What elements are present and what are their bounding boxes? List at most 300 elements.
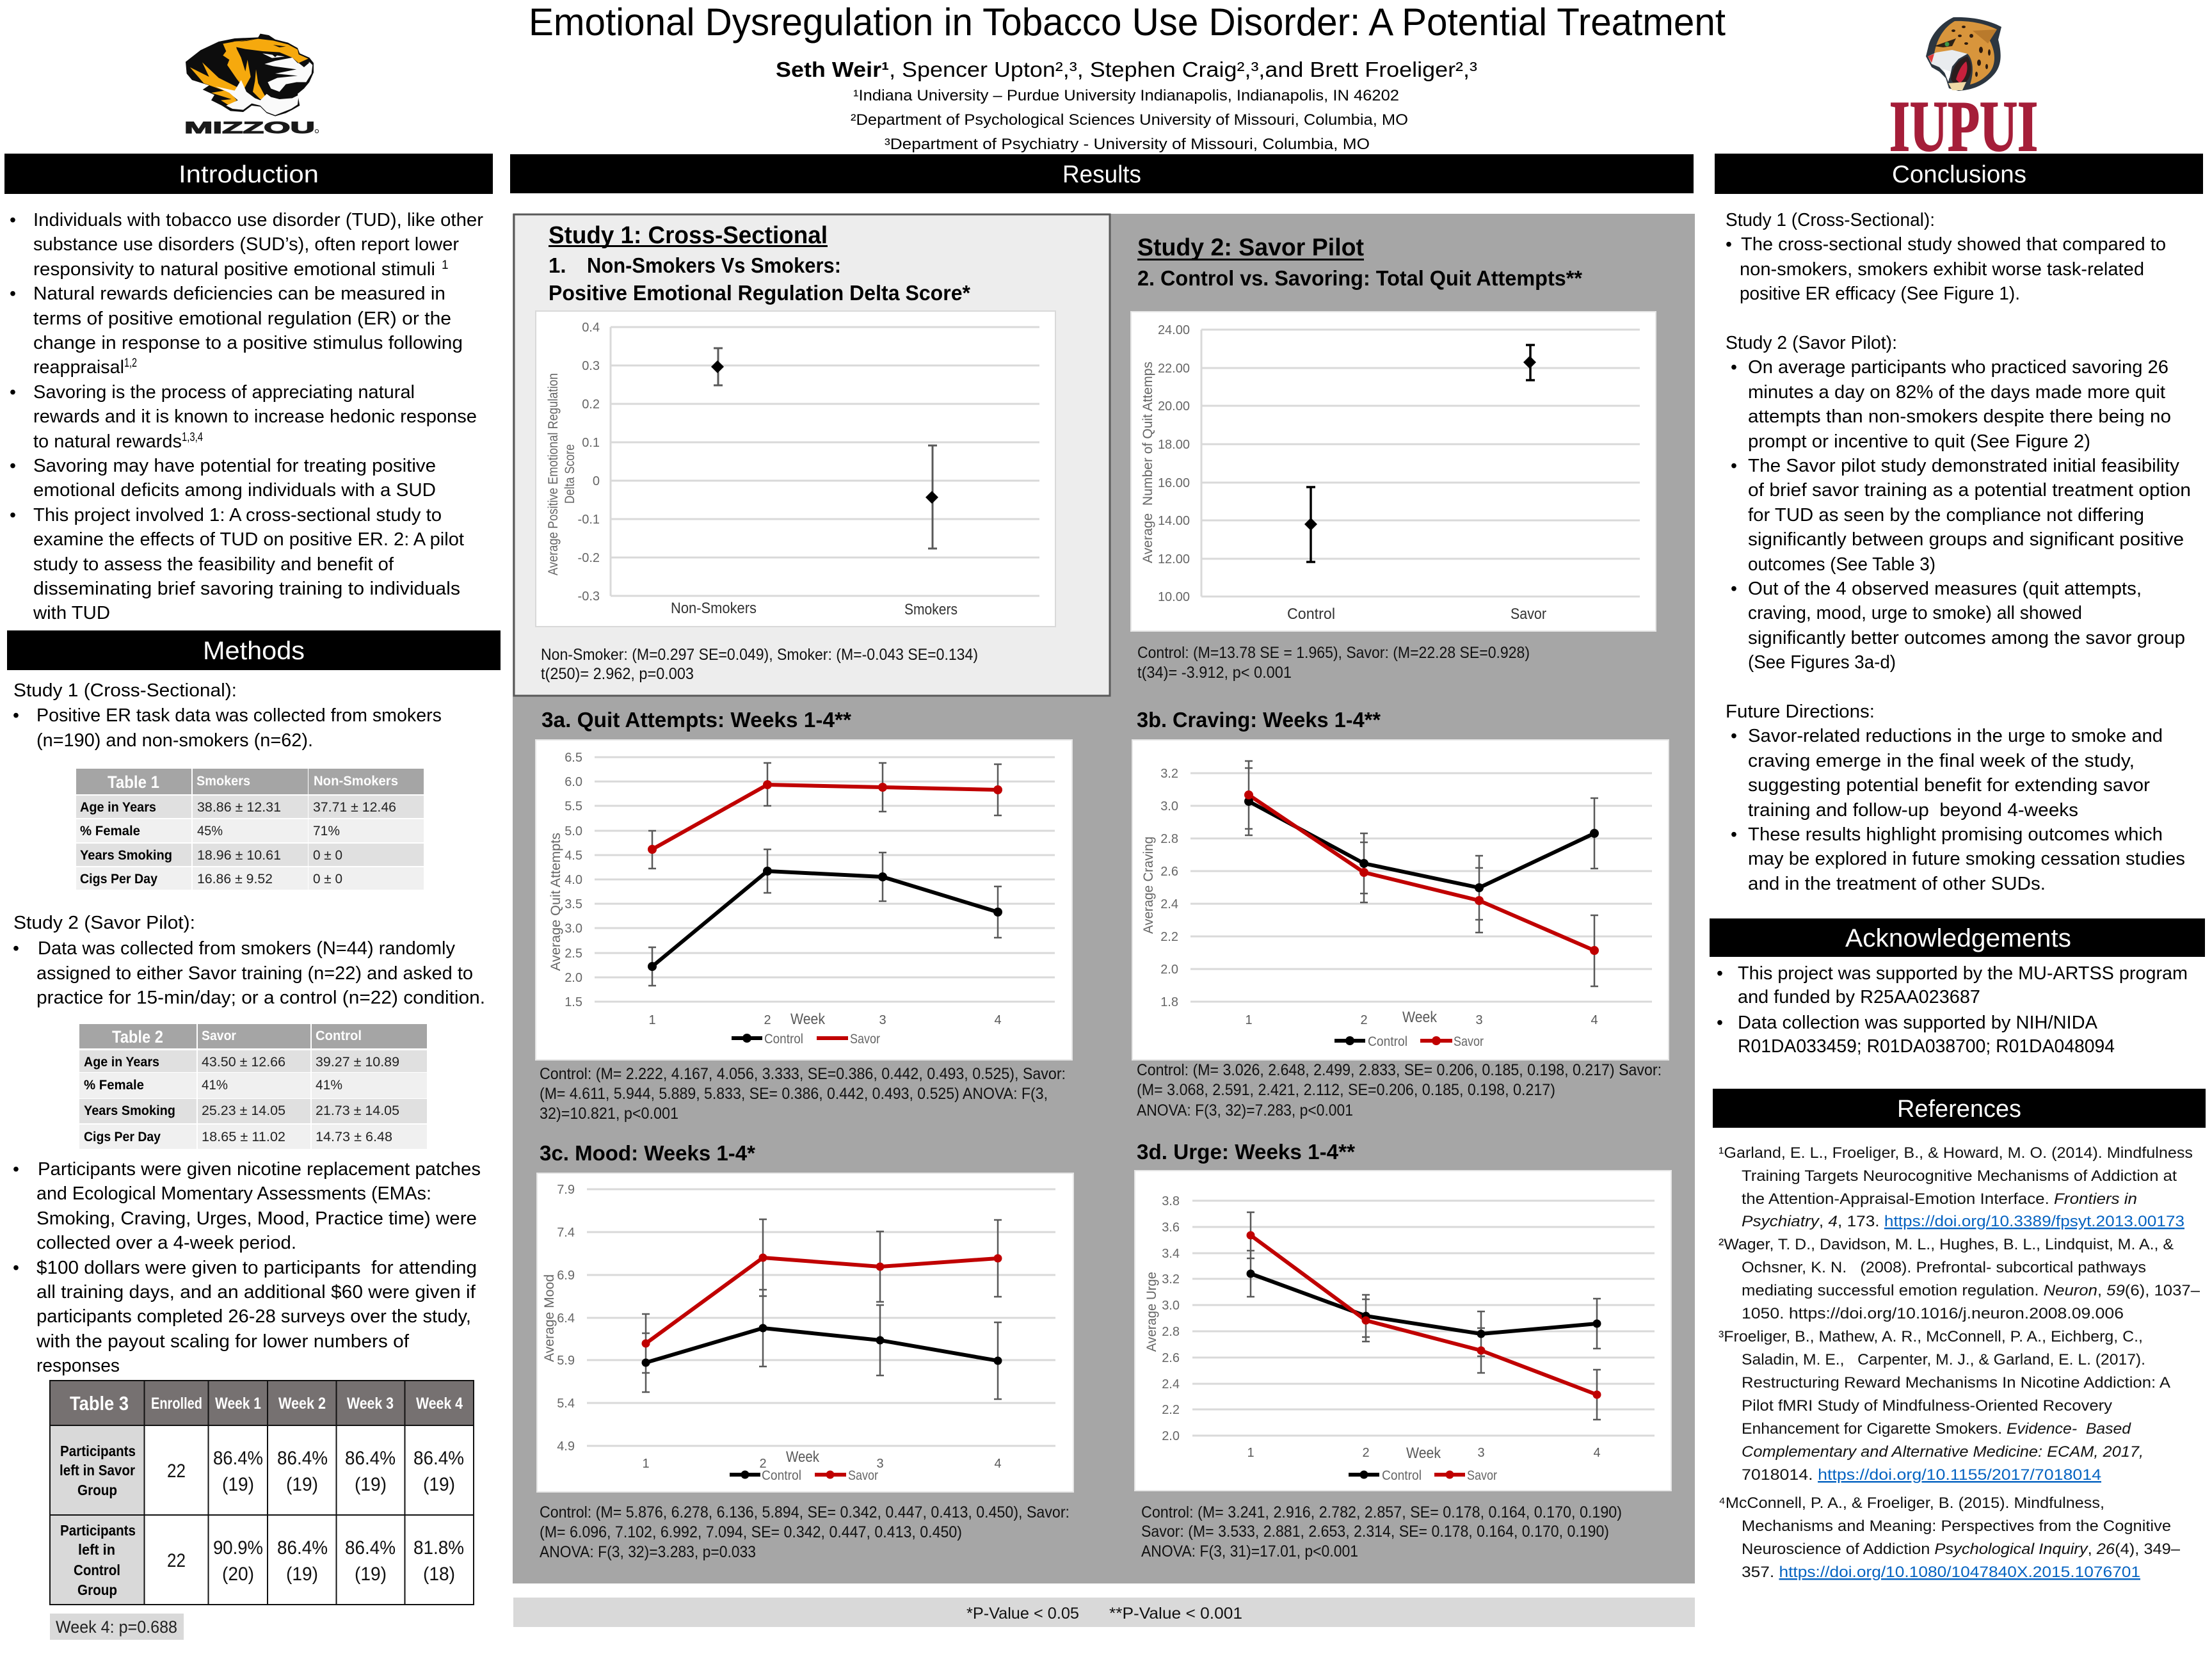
text block: study 2 conclusions: of brief savor training as a potential treatment option bbox=[1748, 480, 2191, 501]
table 2: 43.50 ± 12.66 bbox=[202, 1055, 285, 1070]
table 3: Participants bbox=[60, 1443, 136, 1459]
chart: 3b craving line chart: 3.0 bbox=[1160, 799, 1178, 813]
chart: figure 2 total quit attempts: 22.00 bbox=[1158, 362, 1190, 376]
text block: reference 3: ³Froeliger, B., Mathew, A. R., McConnell, P. A., Eichberg, C., bbox=[1719, 1328, 2143, 1345]
chart: figure 2 total quit attempts: 18.00 bbox=[1158, 438, 1190, 452]
text block: study 2 conclusions: craving, mood, urge to smoke) all showed bbox=[1748, 603, 2082, 623]
text block: study 2 conclusions: significantly better outcomes among the savor group bbox=[1748, 628, 2185, 648]
text block: 3a statistics: 32)=10.821, p<0.001 bbox=[540, 1105, 678, 1123]
heading: 3d: 3d. Urge: Weeks 1-4** bbox=[1137, 1140, 1355, 1164]
text block: introduction bullets: rewards and it is known to increase hedonic response bbox=[33, 406, 477, 427]
table 3: (18) bbox=[423, 1564, 455, 1585]
text block: figure 2 statistics bbox=[1137, 644, 1530, 682]
text block: future directions: training and follow-up beyond 4-weeks bbox=[1748, 800, 2078, 821]
chart: 3d urge line chart: Week bbox=[1406, 1445, 1441, 1462]
chart: 3d urge line chart: 3.8 bbox=[1162, 1194, 1180, 1208]
table 3: Week 2 bbox=[278, 1395, 326, 1413]
text block: introduction bullets: Savoring may have potential for treating positive bbox=[33, 456, 436, 476]
text block: future directions: may be explored in future smoking cessation studies bbox=[1748, 849, 2185, 869]
table 1: 45% bbox=[197, 824, 223, 838]
chart: 3d urge line chart: 2.0 bbox=[1162, 1429, 1180, 1443]
text block: future directions: craving emerge in the final week of the study, bbox=[1748, 751, 2135, 771]
chart: 3b craving line chart: 1 bbox=[1245, 1013, 1253, 1027]
chart: figure 1 positive ER delta score: -0.3 bbox=[578, 589, 600, 604]
text block: study 2 methods: assigned to either Savor training (n=22) and asked to bbox=[36, 963, 473, 984]
table 3: Enrolled bbox=[151, 1395, 202, 1413]
panel: 3a quit attempts bbox=[536, 708, 1072, 1123]
chart: 3c mood line chart: 1 bbox=[642, 1457, 650, 1471]
text block: procedures bullets: and Ecological Momentary Assessments (EMAs: bbox=[36, 1183, 431, 1204]
table 2: Control bbox=[316, 1029, 362, 1043]
text block: study 2 conclusions: • bbox=[1731, 357, 1737, 378]
chart: 3a quit attempts line chart: 4 bbox=[994, 1013, 1002, 1027]
subheading: figure 2 title: 2. Control vs. Savoring: Total Quit Attempts** bbox=[1137, 266, 1582, 290]
text block: reference 3: Saladin, M. E., Carpenter, M. J., & Garland, E. L. (2017). bbox=[1742, 1351, 2145, 1368]
text block: study 2 methods bbox=[13, 913, 485, 1008]
text block: reference 1: Psychiatry , 4, 173. https://doi.org/10.3389/fpsyt.2013.00173 bbox=[1742, 1213, 2184, 1230]
table 2: % Female bbox=[84, 1078, 144, 1093]
chart: 3a quit attempts line chart: 3.5 bbox=[565, 897, 582, 911]
text block: introduction bullets: substance use disorders (SUD’s), often report lower bbox=[33, 234, 460, 255]
logo wordmark: MIZZOU: MIZZOU bbox=[184, 119, 315, 137]
chart: figure 1 positive ER delta score: Non-Smokers bbox=[671, 600, 757, 617]
text block: reference 3: Restructuring Reward Mechanisms In Nicotine Addiction: A bbox=[1742, 1374, 2171, 1391]
text block: 3a statistics: (M= 4.611, 5.944, 5.889, 5.833, SE= 0.386, 0.442, 0.493, 0.525) ANOVA: F(3, bbox=[540, 1085, 1048, 1103]
text block: introduction bullets: change in response to a positive stimulus following bbox=[33, 333, 463, 353]
text block: reference 4: ⁴McConnell, P. A., & Froeliger, B. (2015). Mindfulness, bbox=[1719, 1495, 2104, 1512]
text block: introduction bullets: • bbox=[10, 210, 16, 230]
text block: introduction bullets: Individuals with tobacco use disorder (TUD), like other bbox=[33, 210, 484, 230]
text block: study 2 conclusions: outcomes (See Table 3) bbox=[1748, 554, 1936, 575]
table 2: 25.23 ± 14.05 bbox=[202, 1103, 285, 1118]
table 2: Savor bbox=[202, 1029, 236, 1043]
chart: figure 2 total quit attempts: 14.00 bbox=[1158, 514, 1190, 528]
heading: conclusions: Conclusions bbox=[1892, 161, 2026, 188]
table 3: Group bbox=[77, 1582, 117, 1598]
table 2 bbox=[79, 1024, 427, 1149]
chart: 3c mood line chart: 6.9 bbox=[557, 1269, 575, 1283]
chart: figure 1 positive ER delta score: 0 bbox=[593, 474, 600, 488]
chart: 3a quit attempts line chart: 6.0 bbox=[565, 775, 582, 789]
heading: 3c: 3c. Mood: Weeks 1-4* bbox=[540, 1141, 755, 1165]
chart: 3c mood line chart: 3 bbox=[876, 1457, 884, 1471]
table 1: Years Smoking bbox=[80, 848, 172, 863]
text block: reference 4: Mechanisms and Meaning: Perspectives from the Cognitive bbox=[1742, 1518, 2171, 1535]
heading: study 1: Study 1: Cross-Sectional bbox=[549, 222, 828, 249]
text block: procedures bullets: • bbox=[13, 1258, 19, 1278]
table 2: 39.27 ± 10.89 bbox=[316, 1055, 399, 1070]
chart: figure 1 positive ER delta score: -0.2 bbox=[578, 551, 600, 565]
chart: 3c mood line chart: 6.4 bbox=[557, 1311, 575, 1326]
chart: 3a quit attempts line chart: 2 bbox=[764, 1013, 771, 1027]
panel: study 2 savor pilot bbox=[1131, 234, 1656, 682]
table 3: (19) bbox=[286, 1474, 318, 1495]
table 1: 71% bbox=[313, 824, 340, 838]
text block: study 2 conclusions: • bbox=[1731, 579, 1737, 599]
chart: figure 1 positive ER delta score: -0.1 bbox=[578, 513, 600, 527]
chart: 3d urge line chart: Average Urge bbox=[1144, 1272, 1159, 1352]
affiliations: ¹Indiana University – Purdue University Indianapolis, Indianapolis, IN 46202 bbox=[853, 87, 1399, 104]
text block: procedures bullets: all training days, and an additional $60 were given if bbox=[36, 1282, 476, 1302]
table 3: 86.4% bbox=[277, 1448, 328, 1469]
table 1: 16.86 ± 9.52 bbox=[197, 872, 273, 886]
legend: p-value significance bar bbox=[513, 1598, 1695, 1627]
text block: figure 1 statistics: t(250)= 2.962, p=0.003 bbox=[541, 665, 694, 683]
table 2: Years Smoking bbox=[84, 1103, 175, 1118]
chart: 3b craving line chart: 2 bbox=[1360, 1013, 1368, 1027]
text block: study 2 conclusions bbox=[1726, 333, 2191, 673]
text block: reference 3 bbox=[1719, 1328, 2171, 1484]
table 3: 81.8% bbox=[413, 1537, 464, 1559]
chart: 3a quit attempts line chart: 4.0 bbox=[565, 873, 582, 887]
chart: figure 2 total quit attempts: 12.00 bbox=[1158, 552, 1190, 566]
text block: reference 3: 7018014. https://doi.org/10.1155/2017/7018014 bbox=[1742, 1466, 2101, 1484]
table 3: (20) bbox=[222, 1564, 254, 1585]
table 3: 86.4% bbox=[413, 1448, 464, 1469]
chart: 3b craving line chart: 2.6 bbox=[1160, 865, 1178, 879]
table 3: Week 3 bbox=[347, 1395, 394, 1413]
table 3: (19) bbox=[423, 1474, 455, 1495]
text block: study 2 conclusions: The Savor pilot study demonstrated initial feasibility bbox=[1748, 456, 2180, 476]
chart: 3b craving line chart: 1.8 bbox=[1160, 995, 1178, 1009]
text block: acknowledgements: and funded by R25AA023687 bbox=[1738, 987, 1980, 1007]
subheading: figure 1 title: Positive Emotional Regulation Delta Score* bbox=[549, 281, 970, 305]
heading: 3a: 3a. Quit Attempts: Weeks 1-4** bbox=[541, 708, 851, 732]
text block: study 1 conclusions: non-smokers, smokers exhibit worse task-related bbox=[1740, 259, 2144, 280]
text block: study 2 methods: • bbox=[13, 938, 19, 959]
text block: study 1 conclusions: • bbox=[1726, 234, 1732, 255]
panel: acknowledgements bbox=[1710, 918, 2205, 1057]
text block: study 1 conclusions: Study 1 (Cross-Sectional): bbox=[1726, 210, 1935, 230]
callout: week 4 p-value bbox=[50, 1614, 184, 1640]
text block: study 2 methods: practice for 15-min/day; or a control (n=22) condition. bbox=[36, 988, 485, 1008]
table 3 bbox=[50, 1381, 474, 1605]
chart: figure 2 total quit attempts: 16.00 bbox=[1158, 476, 1190, 490]
chart: figure 1 positive ER delta score: 0.4 bbox=[582, 321, 600, 335]
panel: references bbox=[1713, 1089, 2206, 1581]
text block: reference 1 bbox=[1719, 1144, 2193, 1230]
text block: 3c statistics: Control: (M= 5.876, 6.278, 6.136, 5.894, SE= 0.342, 0.447, 0.413, 0.450), Savor: bbox=[540, 1503, 1070, 1521]
chart: 3d urge line chart: Savor bbox=[1467, 1468, 1497, 1483]
panel: results bbox=[510, 154, 1695, 1627]
text block: reference 2: Ochsner, K. N. (2008). Prefrontal- subcortical pathways bbox=[1742, 1259, 2146, 1276]
text block: reference 3: Complementary and Alternative Medicine: ECAM, 2017, bbox=[1742, 1443, 2144, 1461]
chart: figure 1 positive ER delta score: Average Positive Emotional Regulation bbox=[546, 373, 561, 575]
text block: future directions: • bbox=[1731, 824, 1737, 845]
text block: introduction bullets: Natural rewards deficiencies can be measured in bbox=[33, 284, 445, 304]
chart: figure 1 positive ER delta score: Smokers bbox=[904, 601, 958, 618]
chart: 3c mood line chart: Week bbox=[786, 1448, 820, 1466]
text block: introduction bullets: to natural rewards bbox=[33, 431, 182, 452]
chart: 3c mood line chart: 7.4 bbox=[557, 1226, 575, 1240]
table 3: 22 bbox=[167, 1461, 186, 1482]
chart: 3b craving line chart bbox=[1132, 740, 1669, 1060]
table 3: left in bbox=[78, 1541, 115, 1558]
text block: acknowledgements bbox=[1717, 963, 2188, 1057]
table 3: Participants bbox=[60, 1522, 136, 1539]
chart: figure 1 positive ER delta score: 0.2 bbox=[582, 397, 600, 412]
text block: procedures bullets: Participants were given nicotine replacement patches bbox=[38, 1159, 481, 1180]
text block: introduction bullets: with TUD bbox=[33, 603, 110, 623]
table 3: Week 4 bbox=[416, 1395, 463, 1413]
subheading: figure 1 title: Non-Smokers Vs Smokers: bbox=[587, 253, 841, 277]
chart: 3a quit attempts line chart: Week bbox=[790, 1011, 826, 1028]
text block: 3b statistics bbox=[1137, 1061, 1662, 1119]
chart: 3b craving line chart: 3.2 bbox=[1160, 767, 1178, 781]
heading: acknowledgements bbox=[1710, 918, 2205, 957]
chart: 3c mood line chart bbox=[537, 1173, 1073, 1492]
heading: references bbox=[1713, 1089, 2206, 1128]
chart: 3a quit attempts line chart bbox=[536, 740, 1072, 1060]
text block: study 1 methods bbox=[13, 680, 442, 751]
text block: study 2 conclusions: minutes a day on 82% of the days made more quit bbox=[1748, 382, 2165, 403]
panel: methods bbox=[7, 630, 501, 1640]
text block: study 2 conclusions: On average participants who practiced savoring 26 bbox=[1748, 357, 2168, 378]
text block: 3c statistics: ANOVA: F(3, 32)=3.283, p=0.033 bbox=[540, 1543, 756, 1561]
heading: references: References bbox=[1897, 1096, 2021, 1123]
chart: figure 2 total quit attempts: 24.00 bbox=[1158, 323, 1190, 337]
subheading: figure 1 title bbox=[549, 253, 970, 305]
chart: 3c mood line chart: 4.9 bbox=[557, 1439, 575, 1454]
text block: study 2 conclusions: prompt or incentive to quit (See Figure 2) bbox=[1748, 431, 2090, 452]
text block: acknowledgements: R01DA033459; R01DA038700; R01DA048094 bbox=[1738, 1036, 2115, 1057]
heading: 3b: 3b. Craving: Weeks 1-4** bbox=[1137, 708, 1381, 732]
chart: 3c mood line chart: Control bbox=[762, 1468, 801, 1483]
panel: conclusions bbox=[1715, 154, 2203, 894]
heading: acknowledgements: Acknowledgements bbox=[1845, 924, 2071, 952]
text block: introduction bullets: responsivity to natural positive emotional stimuli bbox=[33, 259, 435, 280]
table 2: Age in Years bbox=[84, 1055, 159, 1070]
legend: p-value significance bar: *P-Value < 0.05 bbox=[966, 1605, 1079, 1623]
chart: figure 2 total quit attempts: Control bbox=[1287, 605, 1335, 623]
text block: 3b statistics: (M= 3.068, 2.591, 2.421, 2.112, SE=0.206, 0.185, 0.198, 0.217) bbox=[1137, 1081, 1555, 1099]
chart: 3c mood line chart: Average Mood bbox=[542, 1274, 557, 1362]
chart: 3c mood line chart: Savor bbox=[848, 1468, 878, 1483]
table 2: Cigs Per Day bbox=[84, 1130, 161, 1144]
text block: reference 3: Enhancement for Cigarette Smokers. Evidence- Based bbox=[1742, 1420, 2131, 1438]
text block: reference 1: the Attention-Appraisal-Emotion Interface. Frontiers in bbox=[1742, 1190, 2137, 1208]
panel: 3c mood bbox=[537, 1141, 1073, 1561]
panel: study 1 cross-sectional bbox=[514, 214, 1110, 696]
text block: study 2 conclusions: significantly between groups and significant positive bbox=[1748, 529, 2184, 550]
results gray background bbox=[513, 214, 1695, 1583]
chart: 3a quit attempts line chart: Average Quit Attempts bbox=[549, 833, 563, 971]
table 1: 18.96 ± 10.61 bbox=[197, 848, 281, 863]
table 3: Table 3 bbox=[70, 1392, 129, 1415]
text block: reference 1: ¹Garland, E. L., Froeliger, B., & Howard, M. O. (2014). Mindfulness bbox=[1719, 1144, 2193, 1162]
text block: reference 3: Pilot fMRI Study of Mindfulness-Oriented Recovery bbox=[1742, 1397, 2113, 1415]
text block: study 1 methods: Study 1 (Cross-Sectional): bbox=[13, 680, 237, 701]
chart: figure 1 positive ER delta score: 0.3 bbox=[582, 359, 600, 373]
table 3: (19) bbox=[355, 1474, 387, 1495]
text block: procedures bullets: Smoking, Craving, Urges, Mood, Practice time) were bbox=[36, 1208, 477, 1229]
chart: 3d urge line chart: 1 bbox=[1247, 1446, 1254, 1460]
affiliations: ³Department of Psychiatry - University of Missouri, Columbia, MO bbox=[885, 136, 1370, 153]
text block: reference 4: Neuroscience of Addiction Psychological Inquiry , 26(4), 349– bbox=[1742, 1541, 2180, 1558]
table 1: Smokers bbox=[196, 774, 250, 789]
text block: study 2 methods: Study 2 (Savor Pilot): bbox=[13, 913, 195, 933]
text block: study 2 conclusions: Study 2 (Savor Pilot): bbox=[1726, 333, 1897, 353]
text block: introduction bullets: • bbox=[10, 505, 16, 525]
chart: 3d urge line chart: 3 bbox=[1477, 1446, 1485, 1460]
chart: 3b craving line chart: Week bbox=[1402, 1009, 1438, 1026]
logo: Mizzou tiger bbox=[184, 34, 319, 137]
text block: procedures bullets: participants completed 26-28 surveys over the study, bbox=[36, 1306, 471, 1327]
table 1: 37.71 ± 12.46 bbox=[313, 800, 396, 815]
heading: introduction: Introduction bbox=[179, 161, 319, 188]
panel: 3b craving bbox=[1132, 708, 1669, 1119]
chart: 3d urge line chart: 3.2 bbox=[1162, 1272, 1180, 1286]
text block: study 2 conclusions: Out of the 4 observed measures (quit attempts, bbox=[1748, 579, 2142, 599]
text block: figure 1 statistics: Non-Smoker: (M=0.297 SE=0.049), Smoker: (M=-0.043 SE=0.134) bbox=[541, 646, 978, 664]
legend: p-value significance bar: **P-Value < 0.001 bbox=[1109, 1605, 1242, 1623]
text block: reference 2: ²Wager, T. D., Davidson, M. L., Hughes, B. L., Lindquist, M. A., & bbox=[1719, 1236, 2174, 1253]
table 2: 14.73 ± 6.48 bbox=[316, 1130, 392, 1144]
table 2: 41% bbox=[316, 1078, 342, 1093]
chart: 3d urge line chart: 2 bbox=[1362, 1446, 1370, 1460]
text block: study 1 methods: • bbox=[13, 705, 19, 726]
chart: 3d urge line chart: 3.0 bbox=[1162, 1299, 1180, 1313]
text block: introduction bullets: • bbox=[10, 284, 16, 304]
text block: 3d statistics: ANOVA: F(3, 31)=17.01, p<0.001 bbox=[1141, 1543, 1358, 1560]
chart: 3a quit attempts line chart: 6.5 bbox=[565, 751, 582, 765]
chart: figure 1 positive ER delta score: 0.1 bbox=[582, 436, 600, 450]
chart: 3d urge line chart: 2.6 bbox=[1162, 1351, 1180, 1365]
logo wordmark: IUPUI: IUPUI bbox=[1889, 87, 2038, 166]
chart: 3a quit attempts line chart: 2.0 bbox=[565, 971, 582, 985]
text block: procedures bullets: • bbox=[13, 1159, 19, 1180]
chart: figure 2 total quit attempts: Savor bbox=[1511, 605, 1546, 623]
table 3: 86.4% bbox=[345, 1448, 396, 1469]
heading: introduction bbox=[4, 154, 493, 194]
text block: study 2 conclusions: • bbox=[1731, 456, 1737, 476]
chart: 3a quit attempts line chart: 1.5 bbox=[565, 995, 582, 1009]
heading: study 2: Study 2: Savor Pilot bbox=[1137, 234, 1364, 261]
text block: introduction bullets: 1,2 bbox=[124, 357, 137, 370]
text block: study 1 methods: Positive ER task data was collected from smokers bbox=[36, 705, 442, 726]
affiliations bbox=[851, 87, 1408, 153]
chart: 3a quit attempts line chart: 3.0 bbox=[565, 922, 582, 936]
text block: 3b statistics: Control: (M= 3.026, 2.648, 2.499, 2.833, SE= 0.206, 0.185, 0.198, 0.217) Savor: bbox=[1137, 1061, 1662, 1079]
text block: procedures bullets: with the payout scaling for lower numbers of bbox=[36, 1331, 409, 1352]
text block: introduction bullets: 1 bbox=[442, 259, 449, 272]
table 3: 86.4% bbox=[345, 1537, 396, 1559]
authors: Seth Weir¹ , Spencer Upton²,³, Stephen Craig²,³,and Brett Froeliger²,³ bbox=[776, 58, 1477, 81]
text block: study 1 conclusions: positive ER efficacy (See Figure 1). bbox=[1740, 284, 2020, 304]
callout: week 4 p-value: Week 4: p=0.688 bbox=[56, 1617, 177, 1637]
text block: future directions bbox=[1726, 701, 2185, 894]
text block: study 2 conclusions: (See Figures 3a-d) bbox=[1748, 652, 1896, 673]
chart: 3d urge line chart: 4 bbox=[1593, 1446, 1601, 1460]
heading: methods: Methods bbox=[203, 637, 305, 665]
text block: future directions: These results highlight promising outcomes which bbox=[1748, 824, 2163, 845]
text block: procedures bullets bbox=[13, 1159, 481, 1376]
chart: 3a quit attempts line chart: 1 bbox=[648, 1013, 656, 1027]
chart: 3a quit attempts line chart: Control bbox=[764, 1032, 803, 1046]
text block: study 2 conclusions: attempts than non-smokers despite there being no bbox=[1748, 406, 2171, 427]
text block: 3b statistics: ANOVA: F(3, 32)=7.283, p<0.001 bbox=[1137, 1102, 1353, 1119]
table 2: Table 2 bbox=[112, 1027, 163, 1046]
text block: future directions: and in the treatment of other SUDs. bbox=[1748, 874, 2046, 894]
chart: 3a quit attempts line chart: 2.5 bbox=[565, 947, 582, 961]
chart: 3c mood line chart: 4 bbox=[994, 1457, 1002, 1471]
chart: 3b craving line chart: 3 bbox=[1475, 1013, 1483, 1027]
table 3: Group bbox=[77, 1482, 117, 1498]
chart: 3b craving line chart: Control bbox=[1368, 1034, 1407, 1049]
text block: introduction bullets: terms of positive emotional regulation (ER) or the bbox=[33, 309, 451, 329]
text block: future directions: • bbox=[1731, 726, 1737, 746]
chart: 3d urge line chart: 2.8 bbox=[1162, 1325, 1180, 1339]
chart: 3d urge line chart: 2.4 bbox=[1162, 1377, 1180, 1391]
chart: 3b craving line chart: 2.0 bbox=[1160, 963, 1178, 977]
text block: introduction bullets: examine the effects of TUD on positive ER. 2: A pilot bbox=[33, 529, 464, 550]
text block: 3d statistics bbox=[1141, 1503, 1622, 1560]
table 3: (19) bbox=[222, 1474, 254, 1495]
chart: figure 1 positive ER delta score: Delta Score bbox=[563, 444, 577, 504]
heading: results bbox=[510, 154, 1694, 193]
table 3: 90.9% bbox=[213, 1537, 263, 1559]
chart: 3a quit attempts line chart: 5.5 bbox=[565, 799, 582, 813]
chart: 3c mood line chart: 5.9 bbox=[557, 1354, 575, 1368]
table 1: Age in Years bbox=[80, 800, 156, 815]
chart: 3b craving line chart: Savor bbox=[1454, 1034, 1484, 1049]
chart: figure 2 total quit attempts bbox=[1131, 312, 1656, 631]
table 3: (19) bbox=[355, 1564, 387, 1585]
subheading: figure 1 title: 1. bbox=[549, 253, 566, 277]
title: Emotional Dysregulation in Tobacco Use Disorder: A Potential Treatment bbox=[529, 1, 1726, 44]
text block: introduction bullets: emotional deficits among individuals with a SUD bbox=[33, 480, 436, 501]
table 2: 21.73 ± 14.05 bbox=[316, 1103, 399, 1118]
text block: introduction bullets: Savoring is the process of appreciating natural bbox=[33, 382, 415, 403]
table 1 bbox=[76, 769, 424, 890]
text block: procedures bullets: collected over a 4-week period. bbox=[36, 1233, 296, 1253]
table 3: (19) bbox=[286, 1564, 318, 1585]
text block: 3c statistics: (M= 6.096, 7.102, 6.992, 7.094, SE= 0.342, 0.447, 0.413, 0.450) bbox=[540, 1523, 962, 1541]
text block: reference 2 bbox=[1719, 1236, 2200, 1322]
text block: study 1 conclusions bbox=[1726, 210, 2166, 304]
text block: study 1 methods: (n=190) and non-smokers (n=62). bbox=[36, 730, 313, 751]
table 1: 38.86 ± 12.31 bbox=[197, 800, 281, 815]
table 2: 18.65 ± 11.02 bbox=[202, 1130, 285, 1144]
text block: acknowledgements: • bbox=[1717, 1013, 1723, 1033]
heading: conclusions bbox=[1715, 154, 2203, 194]
table 1: Table 1 bbox=[108, 773, 159, 792]
chart: 3d urge line chart: 3.6 bbox=[1162, 1221, 1180, 1235]
logo: IUPUI jaguar bbox=[1889, 17, 2038, 166]
chart: figure 1 positive ER delta score bbox=[536, 311, 1055, 627]
chart: figure 2 total quit attempts: 20.00 bbox=[1158, 399, 1190, 413]
chart: 3c mood line chart: 2 bbox=[759, 1457, 767, 1471]
table 3: 86.4% bbox=[277, 1537, 328, 1559]
table 3: 86.4% bbox=[213, 1448, 263, 1469]
text block: acknowledgements: This project was supported by the MU-ARTSS program bbox=[1738, 963, 2188, 984]
table 1: Cigs Per Day bbox=[80, 872, 157, 886]
text block: 3d statistics: Control: (M= 3.241, 2.916, 2.782, 2.857, SE= 0.178, 0.164, 0.170, 0.190) bbox=[1141, 1503, 1622, 1521]
text block: introduction bullets: • bbox=[10, 456, 16, 476]
text block: future directions: Future Directions: bbox=[1726, 701, 1875, 722]
chart: 3a quit attempts line chart: Savor bbox=[850, 1032, 880, 1046]
chart: 3c mood line chart: 5.4 bbox=[557, 1397, 575, 1411]
text block: 3a statistics: Control: (M= 2.222, 4.167, 4.056, 3.333, SE=0.386, 0.442, 0.493, 0.525), Savor: bbox=[540, 1065, 1066, 1083]
text block: 3d statistics: Savor: (M= 3.533, 2.881, 2.653, 2.314, SE= 0.178, 0.164, 0.170, 0.190) bbox=[1141, 1523, 1609, 1541]
text block: reference 4: 357. https://doi.org/10.1080/1047840X.2015.1076701 bbox=[1742, 1564, 2140, 1581]
chart: 3c mood line chart: 7.9 bbox=[557, 1183, 575, 1197]
text block: reference 4 bbox=[1719, 1495, 2180, 1581]
affiliations: ²Department of Psychological Sciences University of Missouri, Columbia, MO bbox=[851, 111, 1408, 129]
table 3: Control bbox=[74, 1562, 120, 1578]
table 1: 0 ± 0 bbox=[313, 872, 342, 886]
table 1: % Female bbox=[80, 824, 140, 838]
